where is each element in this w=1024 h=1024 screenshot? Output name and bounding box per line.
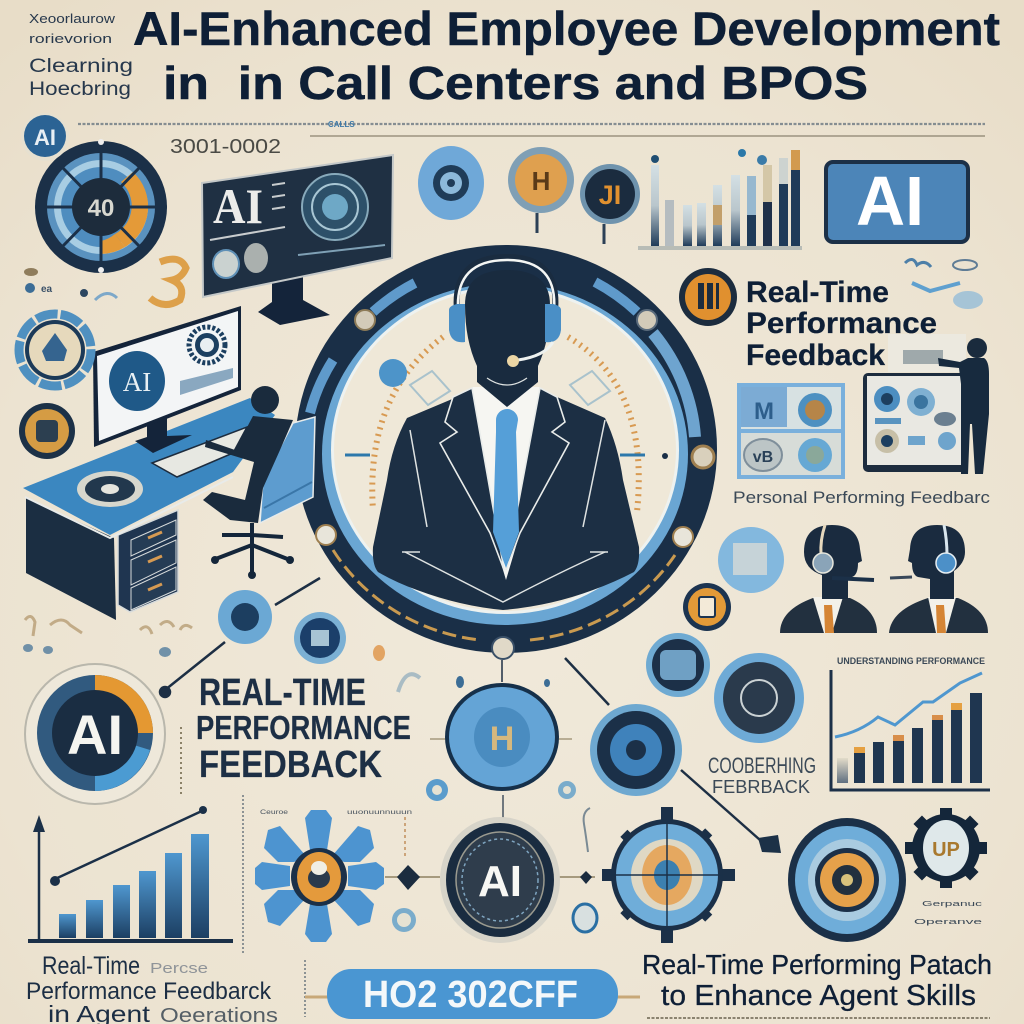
heading: real-time performance feedback (right): Feedback xyxy=(746,339,885,372)
AI box xyxy=(826,162,968,242)
icon: AI badge: AI xyxy=(34,125,56,150)
icon: AI dial centre bottom: AI xyxy=(478,857,522,906)
keyboard xyxy=(152,427,247,477)
date label: 3001-0002 xyxy=(170,136,281,158)
icon: gear left xyxy=(602,807,735,943)
icon: navy medallion lower xyxy=(590,704,682,796)
icon: radial dial xyxy=(35,139,167,273)
icon: AI gauge xyxy=(25,664,165,804)
top monitor xyxy=(202,155,393,325)
text: coaching feedback: COOBERHING xyxy=(708,753,816,778)
button pill: HO2 302CFF xyxy=(363,974,578,1016)
suit jacket xyxy=(373,397,639,610)
top-left small text block: Xeoorlaurow xyxy=(29,11,116,26)
chair xyxy=(260,417,315,523)
icon: tie xyxy=(493,409,519,568)
title: AI-Enhanced Employee Development xyxy=(133,2,1000,55)
icon: AI dial centre bottom xyxy=(440,817,560,943)
top-left small text block: rorievorion xyxy=(29,31,112,46)
headset xyxy=(457,257,555,311)
bar chart right: UNDERSTANDING PERFORMANCE xyxy=(837,656,985,666)
icon: small gear xyxy=(905,808,987,888)
rule under bottom right caption xyxy=(647,1017,990,1019)
central ring xyxy=(295,245,717,659)
lapels xyxy=(440,388,569,570)
top-left small text block xyxy=(29,11,133,100)
top rule with tiny text: CALLS xyxy=(328,120,355,129)
caption: personal performing feedback: Personal Performing Feedbarc xyxy=(733,488,991,507)
icon: blue teardrop xyxy=(418,146,484,220)
icon: AI badge xyxy=(21,113,69,161)
text: bottom right caption xyxy=(642,949,992,1012)
heading: real-time performance feedback (right): Performance xyxy=(746,307,937,340)
connector lines xyxy=(160,578,760,840)
panel: dashboard with four tiles xyxy=(737,383,845,479)
icon: orange medallion: H xyxy=(532,166,550,196)
icon: orange medallion xyxy=(508,147,574,233)
small sketches lower left xyxy=(23,616,550,692)
shirt xyxy=(466,387,546,580)
monitor stand xyxy=(135,415,192,453)
text: coaching feedback xyxy=(708,753,816,797)
central figure: agent in suit xyxy=(373,257,639,610)
bar chart right xyxy=(831,656,990,790)
sleeve seams xyxy=(402,420,608,602)
icon: navy medallion: JI xyxy=(599,180,621,210)
head xyxy=(465,270,550,407)
small label right xyxy=(914,901,983,926)
desk scene: AI xyxy=(123,367,151,397)
heading: real-time performance feedback (right) xyxy=(746,276,937,372)
icon: lower-right satellites xyxy=(646,527,804,743)
top monitor: AI xyxy=(213,178,263,234)
icon: blue medallion centre: H xyxy=(490,720,514,758)
desk top xyxy=(23,398,275,535)
icon: lower-centre satellites xyxy=(218,590,576,801)
panel: dashboard with four tiles: vB xyxy=(753,449,773,466)
icon: orange core dial xyxy=(788,818,906,942)
icon: radial dial: 40 xyxy=(88,195,114,222)
small labels above flower: Ceuroe xyxy=(260,810,289,816)
desk cabinet xyxy=(26,498,116,620)
right agent xyxy=(889,598,988,633)
heading: real-time performance feedback (lower left): FEEDBACK xyxy=(199,744,382,786)
text: bottom left caption: Real-Time xyxy=(42,952,140,980)
text: bottom right caption: to Enhance Agent Skills xyxy=(661,980,976,1012)
icon: arrow head xyxy=(758,835,781,853)
text: bottom left caption xyxy=(26,952,278,1024)
person at desk xyxy=(251,386,279,414)
bar chart top xyxy=(638,149,802,250)
icon: navy medallion xyxy=(580,164,640,244)
small label right: Operanve xyxy=(914,919,982,926)
small labels above flower: uuonuunnuuun xyxy=(347,810,412,816)
icon: AI gauge: AI xyxy=(67,703,123,766)
chart lower left xyxy=(28,795,305,1017)
title xyxy=(133,2,1000,109)
icon: blue medallion centre xyxy=(430,683,572,791)
icon: blue flower xyxy=(255,810,384,942)
desk scene xyxy=(23,306,315,620)
heading: real-time performance feedback (lower left): REAL-TIME xyxy=(199,672,366,714)
monitor xyxy=(93,306,241,447)
button pill xyxy=(305,969,640,1019)
text: bottom right caption: Real-Time Performing Patach xyxy=(642,949,992,980)
icon: orange heading badge xyxy=(679,268,737,326)
small blue marks by heading xyxy=(905,259,983,309)
panel: dashboard with four tiles: M xyxy=(754,398,774,425)
title: in in Call Centers and BPOS xyxy=(163,57,868,109)
icon: small satellites left xyxy=(19,314,91,459)
text: coaching feedback: FEBRBACK xyxy=(712,777,810,797)
left agent xyxy=(780,598,877,633)
heading: real-time performance feedback (right): Real-Time xyxy=(746,276,889,309)
text: bottom left caption: Performance Feedbarck xyxy=(26,978,272,1005)
top-left small text block: Clearning xyxy=(29,56,133,77)
panel: tablet and presenter xyxy=(863,334,989,474)
small decorative icons left: ea xyxy=(41,284,53,295)
two agents with headsets xyxy=(780,525,988,633)
small label right: Gerpanuc xyxy=(922,901,983,908)
connector diamond xyxy=(385,808,597,932)
top-left small text block: Hoecbring xyxy=(29,79,131,100)
heading: real-time performance feedback (lower left): PERFORMANCE xyxy=(196,709,411,746)
text: bottom left caption: Percse xyxy=(150,960,208,977)
small decorative icons left xyxy=(24,259,186,305)
small labels above flower xyxy=(260,810,412,816)
icon: small gear: UP xyxy=(932,839,960,861)
AI box: AI xyxy=(856,162,924,240)
heading: real-time performance feedback (lower left) xyxy=(196,672,411,786)
